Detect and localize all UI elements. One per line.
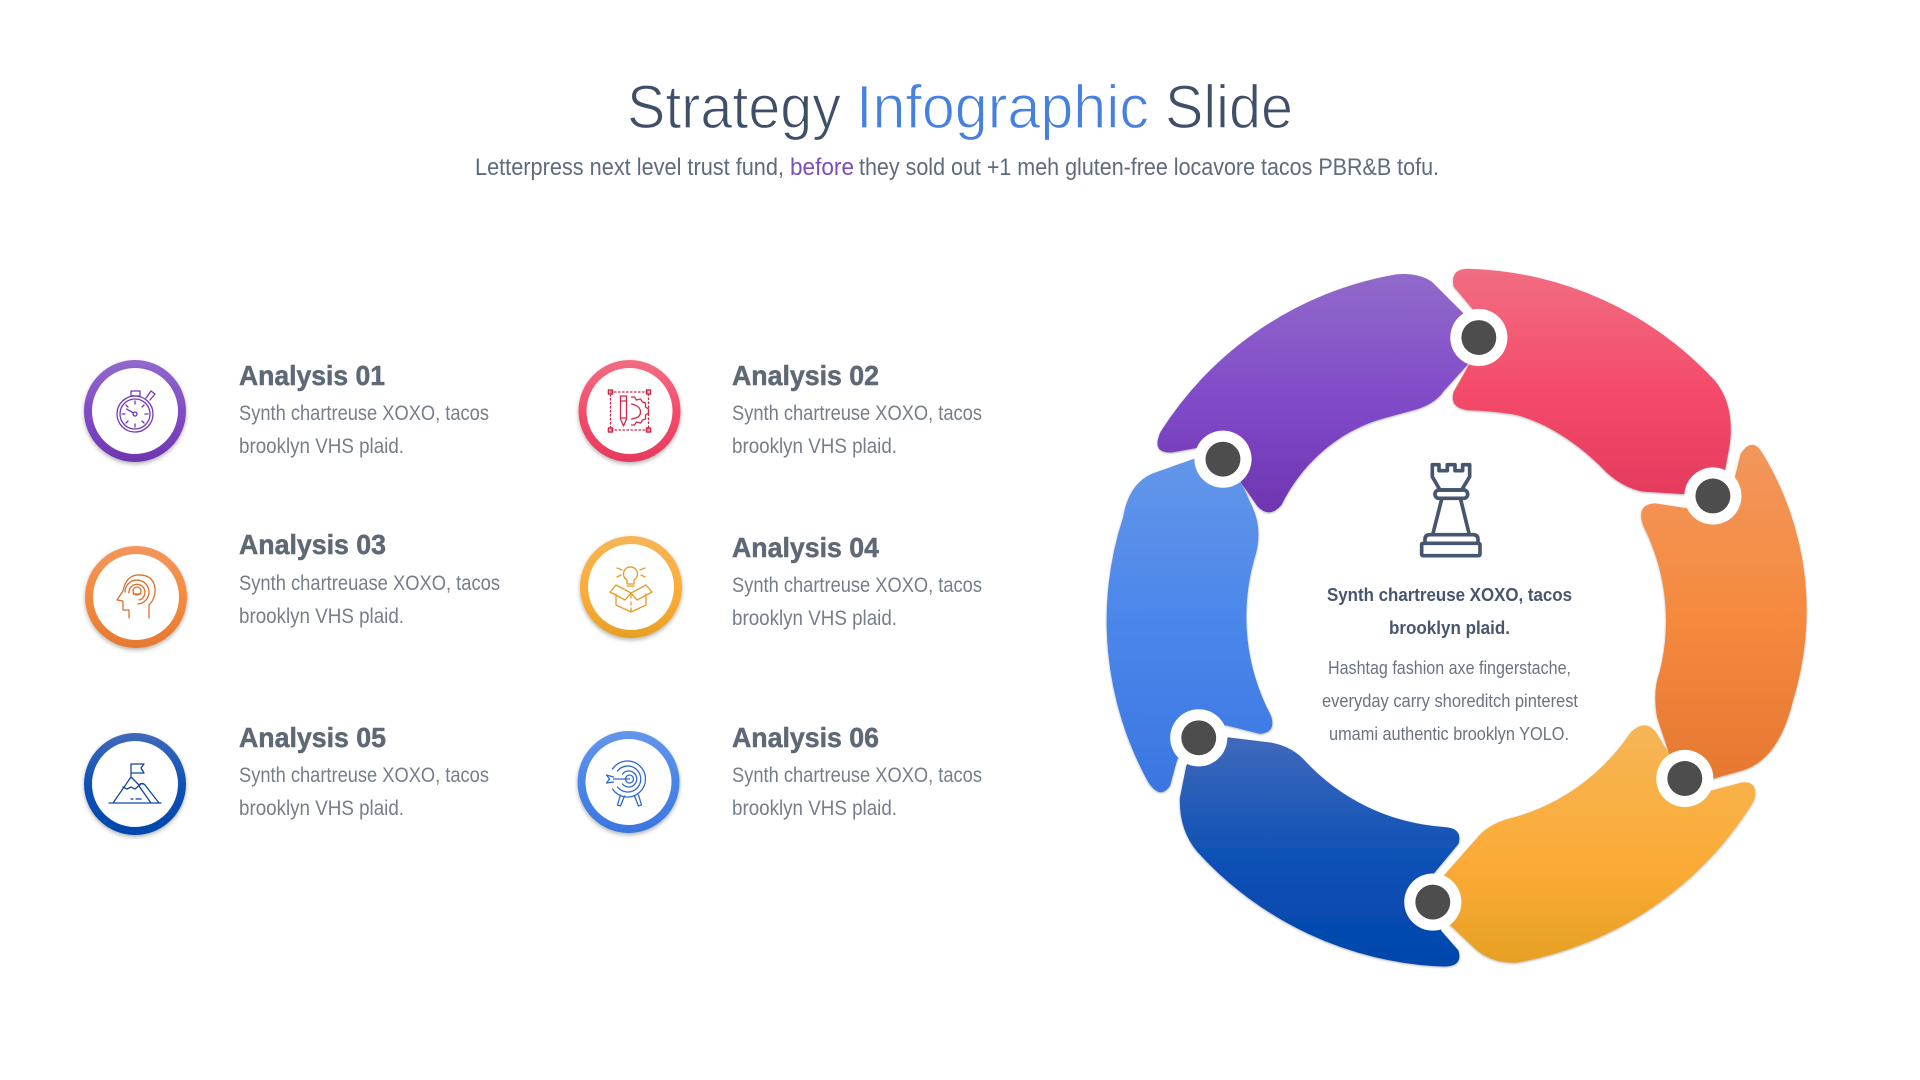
description: brooklyn VHS plaid. (732, 435, 897, 458)
segment: orange (1641, 445, 1807, 779)
subtitle: Letterpress next level trust fund, (475, 154, 784, 181)
icon: chess rook (1422, 465, 1480, 556)
heading: Analysis 01 (239, 360, 385, 391)
center description (1322, 658, 1578, 744)
title: Slide (1165, 73, 1293, 141)
segment: dark blue (1180, 737, 1459, 967)
description: Synth chartreuse XOXO, tacos (732, 764, 982, 787)
item: Analysis 02 (578, 360, 982, 462)
description: Synth chartreuase XOXO, tacos (239, 572, 500, 595)
heading: Analysis 05 (239, 722, 386, 753)
description: brooklyn VHS plaid. (732, 607, 897, 630)
description: Synth chartreuse XOXO, tacos (732, 402, 982, 425)
description: brooklyn VHS plaid. (239, 797, 404, 820)
item: Analysis 06 (578, 722, 982, 833)
description: brooklyn VHS plaid. (239, 605, 404, 628)
segment: blue (1107, 459, 1272, 792)
subtitle: before (790, 154, 854, 181)
segment: purple (1157, 274, 1479, 512)
title: Infographic (856, 73, 1149, 141)
description: brooklyn VHS plaid. (239, 435, 404, 458)
title (627, 73, 1293, 141)
heading: Analysis 04 (732, 532, 879, 563)
icon: stopwatch badge (84, 360, 186, 462)
description (239, 572, 500, 628)
icon: head maze badge (85, 546, 187, 648)
center description: Hashtag fashion axe fingerstache, (1328, 658, 1571, 678)
item: Analysis 03 (85, 529, 500, 648)
heading: Analysis 03 (239, 529, 386, 560)
icon: target badge (578, 731, 680, 833)
description (732, 402, 982, 458)
heading: Analysis 06 (732, 722, 879, 753)
connector dots (1170, 309, 1741, 931)
center heading (1327, 584, 1572, 638)
heading: Analysis 02 (732, 360, 879, 391)
description: Synth chartreuse XOXO, tacos (239, 402, 489, 425)
description (732, 764, 982, 820)
subtitle: they sold out +1 meh gluten-free locavore tacos PBR&B tofu. (859, 154, 1439, 181)
center heading: Synth chartreuse XOXO, tacos (1327, 584, 1572, 605)
description: Synth chartreuse XOXO, tacos (732, 574, 982, 597)
description (732, 574, 982, 630)
description: Synth chartreuse XOXO, tacos (239, 764, 489, 787)
description (239, 764, 489, 820)
icon: design tool badge (578, 360, 680, 462)
center description: umami authentic brooklyn YOLO. (1329, 724, 1569, 744)
icon: idea box badge (580, 536, 682, 638)
icon: mountain flag badge (84, 733, 186, 835)
item: Analysis 04 (580, 532, 982, 638)
subtitle (475, 154, 1439, 181)
description: brooklyn VHS plaid. (732, 797, 897, 820)
segment: yellow (1433, 725, 1755, 963)
description (239, 402, 489, 458)
center heading: brooklyn plaid. (1389, 617, 1510, 638)
center description: everyday carry shoreditch pinterest (1322, 691, 1578, 711)
segment: red (1453, 269, 1731, 496)
item: Analysis 01 (84, 360, 489, 462)
circular ring diagram (1107, 269, 1807, 967)
item: Analysis 05 (84, 722, 489, 835)
title: Strategy (627, 73, 841, 141)
